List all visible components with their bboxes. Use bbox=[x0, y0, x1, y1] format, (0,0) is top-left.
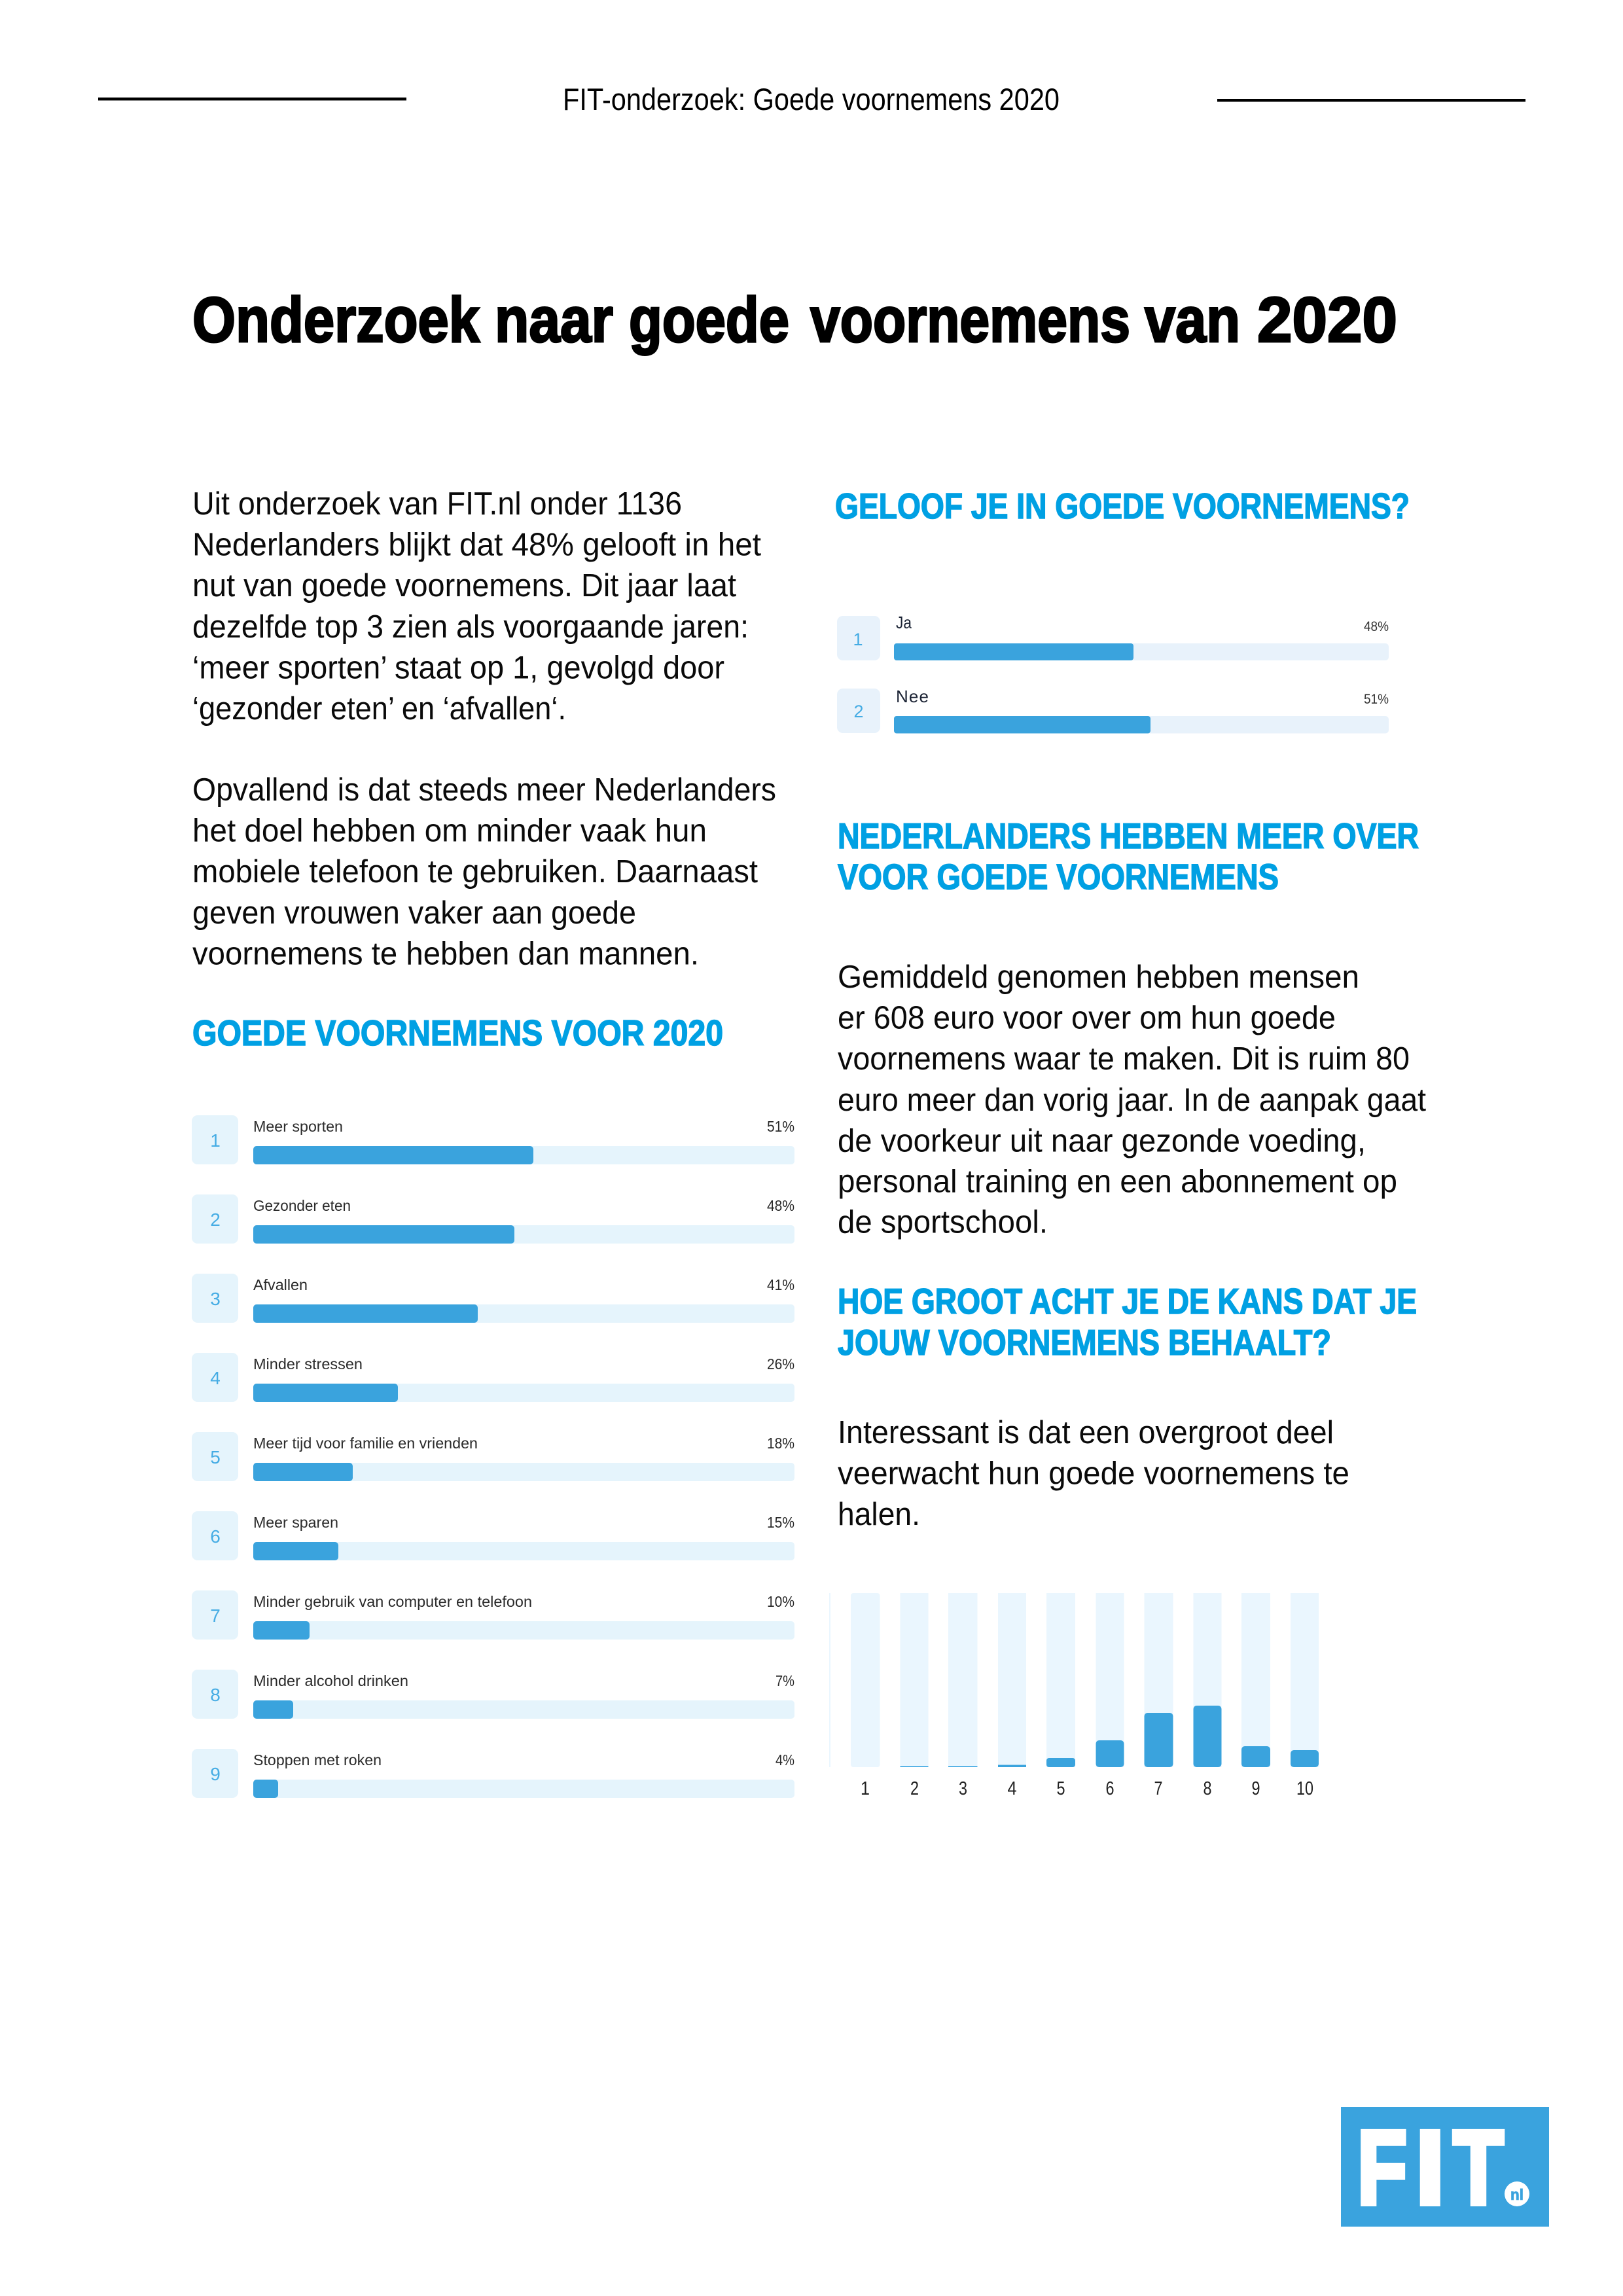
column 6: 6 bbox=[1106, 1778, 1114, 1799]
row 8 bbox=[192, 1670, 794, 1719]
row 3 bbox=[192, 1274, 794, 1323]
row 7 bbox=[192, 1590, 794, 1640]
intro paragraph 2: het doel hebben om minder vaak hun bbox=[192, 814, 707, 849]
row ja: Ja bbox=[896, 613, 912, 632]
header bbox=[98, 82, 1525, 117]
intro paragraph 1 bbox=[192, 486, 761, 726]
column 2: 2 bbox=[910, 1778, 919, 1799]
column 9: 9 bbox=[1251, 1778, 1260, 1799]
row 8: 8 bbox=[210, 1685, 221, 1705]
column 1 bbox=[851, 1593, 880, 1799]
column 1: 1 bbox=[861, 1778, 870, 1799]
paragraph: interessant bbox=[838, 1415, 1349, 1532]
row 2: 2 bbox=[210, 1210, 221, 1230]
column 10 bbox=[1291, 1593, 1319, 1799]
row 8: Minder alcohol drinken bbox=[253, 1672, 408, 1689]
paragraph: gemiddeld 608 euro: Gemiddeld genomen hebben mensen bbox=[838, 960, 1359, 995]
row 7: 10% bbox=[767, 1593, 794, 1610]
row 4: 26% bbox=[767, 1355, 794, 1372]
heading: hoe groot acht je de kans bbox=[838, 1281, 1417, 1363]
column 5: 5 bbox=[1056, 1778, 1065, 1799]
row nee: 2 bbox=[853, 702, 864, 721]
heading: goede voornemens voor 2020: GOEDE VOORNEMENS VOOR 2020 bbox=[192, 1013, 723, 1053]
row 1: 51% bbox=[767, 1118, 794, 1135]
row 1 bbox=[192, 1115, 794, 1164]
row 2 bbox=[192, 1194, 794, 1244]
row 9: 4% bbox=[776, 1751, 794, 1768]
row 6: Meer sparen bbox=[253, 1514, 338, 1531]
heading: hoe groot acht je de kans: JOUW VOORNEMENS BEHAALT? bbox=[838, 1322, 1331, 1363]
title: voornemens bbox=[810, 284, 1130, 355]
heading: nederlanders hebben meer over bbox=[838, 816, 1419, 897]
row 9: Stoppen met roken bbox=[253, 1751, 382, 1768]
paragraph: gemiddeld 608 euro: euro meer dan vorig jaar. In de aanpak gaat bbox=[838, 1083, 1426, 1118]
title: goede bbox=[629, 284, 789, 355]
row 4: Minder stressen bbox=[253, 1355, 363, 1372]
title: naar bbox=[495, 284, 613, 355]
column 9 bbox=[1241, 1593, 1270, 1799]
paragraph: gemiddeld 608 euro: er 608 euro voor over om hun goede bbox=[838, 1001, 1336, 1036]
row 2: Gezonder eten bbox=[253, 1197, 351, 1214]
title: Onderzoek bbox=[192, 284, 480, 355]
row 3: 41% bbox=[767, 1276, 794, 1293]
column 6 bbox=[1096, 1593, 1124, 1799]
header rule left bbox=[98, 98, 406, 101]
title bbox=[192, 284, 1397, 355]
logo: FIT.nl: F bbox=[1357, 2109, 1407, 2226]
column 8 bbox=[1194, 1593, 1221, 1799]
intro paragraph 2 bbox=[192, 772, 776, 971]
row 9: 9 bbox=[210, 1764, 221, 1784]
panel: ranked bar chart voornemens bbox=[192, 1115, 794, 1798]
row 5: Meer tijd voor familie en vrienden bbox=[253, 1435, 478, 1452]
header rule right bbox=[1217, 99, 1525, 102]
row 4 bbox=[192, 1353, 794, 1402]
intro paragraph 2: Opvallend is dat steeds meer Nederlanders bbox=[192, 772, 776, 808]
row 6 bbox=[192, 1511, 794, 1560]
column 5 bbox=[1046, 1593, 1075, 1799]
logo: FIT.nl bbox=[1341, 2107, 1549, 2227]
header text: FIT-onderzoek: Goede voornemens 2020 bbox=[563, 82, 1060, 117]
column 7: 7 bbox=[1154, 1778, 1162, 1799]
row ja: 48% bbox=[1364, 619, 1389, 634]
paragraph: interessant: veerwacht hun goede voornemens te bbox=[838, 1456, 1349, 1492]
heading: geloof je in goede voornemens: GELOOF JE IN GOEDE VOORNEMENS? bbox=[835, 486, 1410, 526]
row 7: 7 bbox=[210, 1605, 221, 1626]
intro paragraph 1: ‘meer sporten’ staat op 1, gevolgd door bbox=[192, 650, 724, 685]
row 1: 1 bbox=[210, 1130, 221, 1151]
intro paragraph 2: mobiele telefoon te gebruiken. Daarnaast bbox=[192, 854, 758, 889]
intro paragraph 1: dezelfde top 3 zien als voorgaande jaren: bbox=[192, 609, 749, 645]
row 6: 6 bbox=[210, 1526, 221, 1547]
intro paragraph 1: Nederlanders blijkt dat 48% gelooft in het bbox=[192, 528, 761, 563]
title: 2020 bbox=[1257, 284, 1397, 355]
column 8: 8 bbox=[1203, 1778, 1212, 1799]
row 5: 18% bbox=[767, 1435, 794, 1452]
column 7 bbox=[1144, 1593, 1173, 1799]
intro paragraph 1: ‘gezonder eten’ en ‘afvallen‘. bbox=[192, 691, 566, 726]
row 5 bbox=[192, 1432, 794, 1481]
intro paragraph 2: geven vrouwen vaker aan goede bbox=[192, 895, 636, 931]
row nee: 51% bbox=[1364, 692, 1389, 707]
panel: ja nee bar chart bbox=[837, 613, 1389, 733]
paragraph: interessant: Interessant is dat een overgroot deel bbox=[838, 1415, 1334, 1450]
intro paragraph 1: Uit onderzoek van FIT.nl onder 1136 bbox=[192, 486, 682, 522]
heading: nederlanders hebben meer over: VOOR GOEDE VOORNEMENS bbox=[838, 856, 1279, 897]
column 4 bbox=[998, 1593, 1026, 1799]
column 3 bbox=[948, 1593, 978, 1799]
column 3: 3 bbox=[959, 1778, 967, 1799]
row nee bbox=[837, 687, 1389, 733]
row 8: 7% bbox=[776, 1672, 794, 1689]
row ja bbox=[837, 613, 1389, 660]
row ja: 1 bbox=[853, 630, 863, 649]
title: van bbox=[1145, 284, 1240, 355]
intro paragraph 2: voornemens te hebben dan mannen. bbox=[192, 936, 699, 971]
heading: nederlanders hebben meer over: NEDERLANDERS HEBBEN MEER OVER bbox=[838, 816, 1419, 856]
column 2 bbox=[901, 1593, 928, 1799]
paragraph: gemiddeld 608 euro: personal training en een abonnement op bbox=[838, 1164, 1397, 1199]
intro paragraph 1: nut van goede voornemens. Dit jaar laat bbox=[192, 568, 736, 603]
heading: hoe groot acht je de kans: HOE GROOT ACHT JE DE KANS DAT JE bbox=[838, 1281, 1417, 1321]
row nee: Nee bbox=[896, 687, 929, 706]
row 3: Afvallen bbox=[253, 1276, 308, 1293]
row 4: 4 bbox=[210, 1368, 221, 1388]
column 10: 10 bbox=[1296, 1778, 1313, 1799]
row 6: 15% bbox=[767, 1514, 794, 1531]
row 2: 48% bbox=[767, 1197, 794, 1214]
paragraph: gemiddeld 608 euro: de sportschool. bbox=[838, 1204, 1048, 1240]
column 4: 4 bbox=[1008, 1778, 1017, 1799]
row 1: Meer sporten bbox=[253, 1118, 343, 1135]
row 5: 5 bbox=[210, 1447, 221, 1467]
logo: FIT.nl: T bbox=[1453, 2109, 1504, 2226]
row 7: Minder gebruik van computer en telefoon bbox=[253, 1593, 532, 1610]
column chart: kans 1 tot 10 bbox=[829, 1593, 1319, 1799]
logo: FIT.nl: I bbox=[1416, 2109, 1445, 2226]
paragraph: gemiddeld 608 euro bbox=[838, 960, 1426, 1240]
paragraph: gemiddeld 608 euro: voornemens waar te maken. Dit is ruim 80 bbox=[838, 1041, 1410, 1077]
paragraph: gemiddeld 608 euro: de voorkeur uit naar gezonde voeding, bbox=[838, 1123, 1366, 1158]
logo: FIT.nl: nl bbox=[1510, 2186, 1524, 2203]
paragraph: interessant: halen. bbox=[838, 1497, 920, 1532]
row 3: 3 bbox=[210, 1289, 221, 1309]
row 9 bbox=[192, 1749, 794, 1798]
